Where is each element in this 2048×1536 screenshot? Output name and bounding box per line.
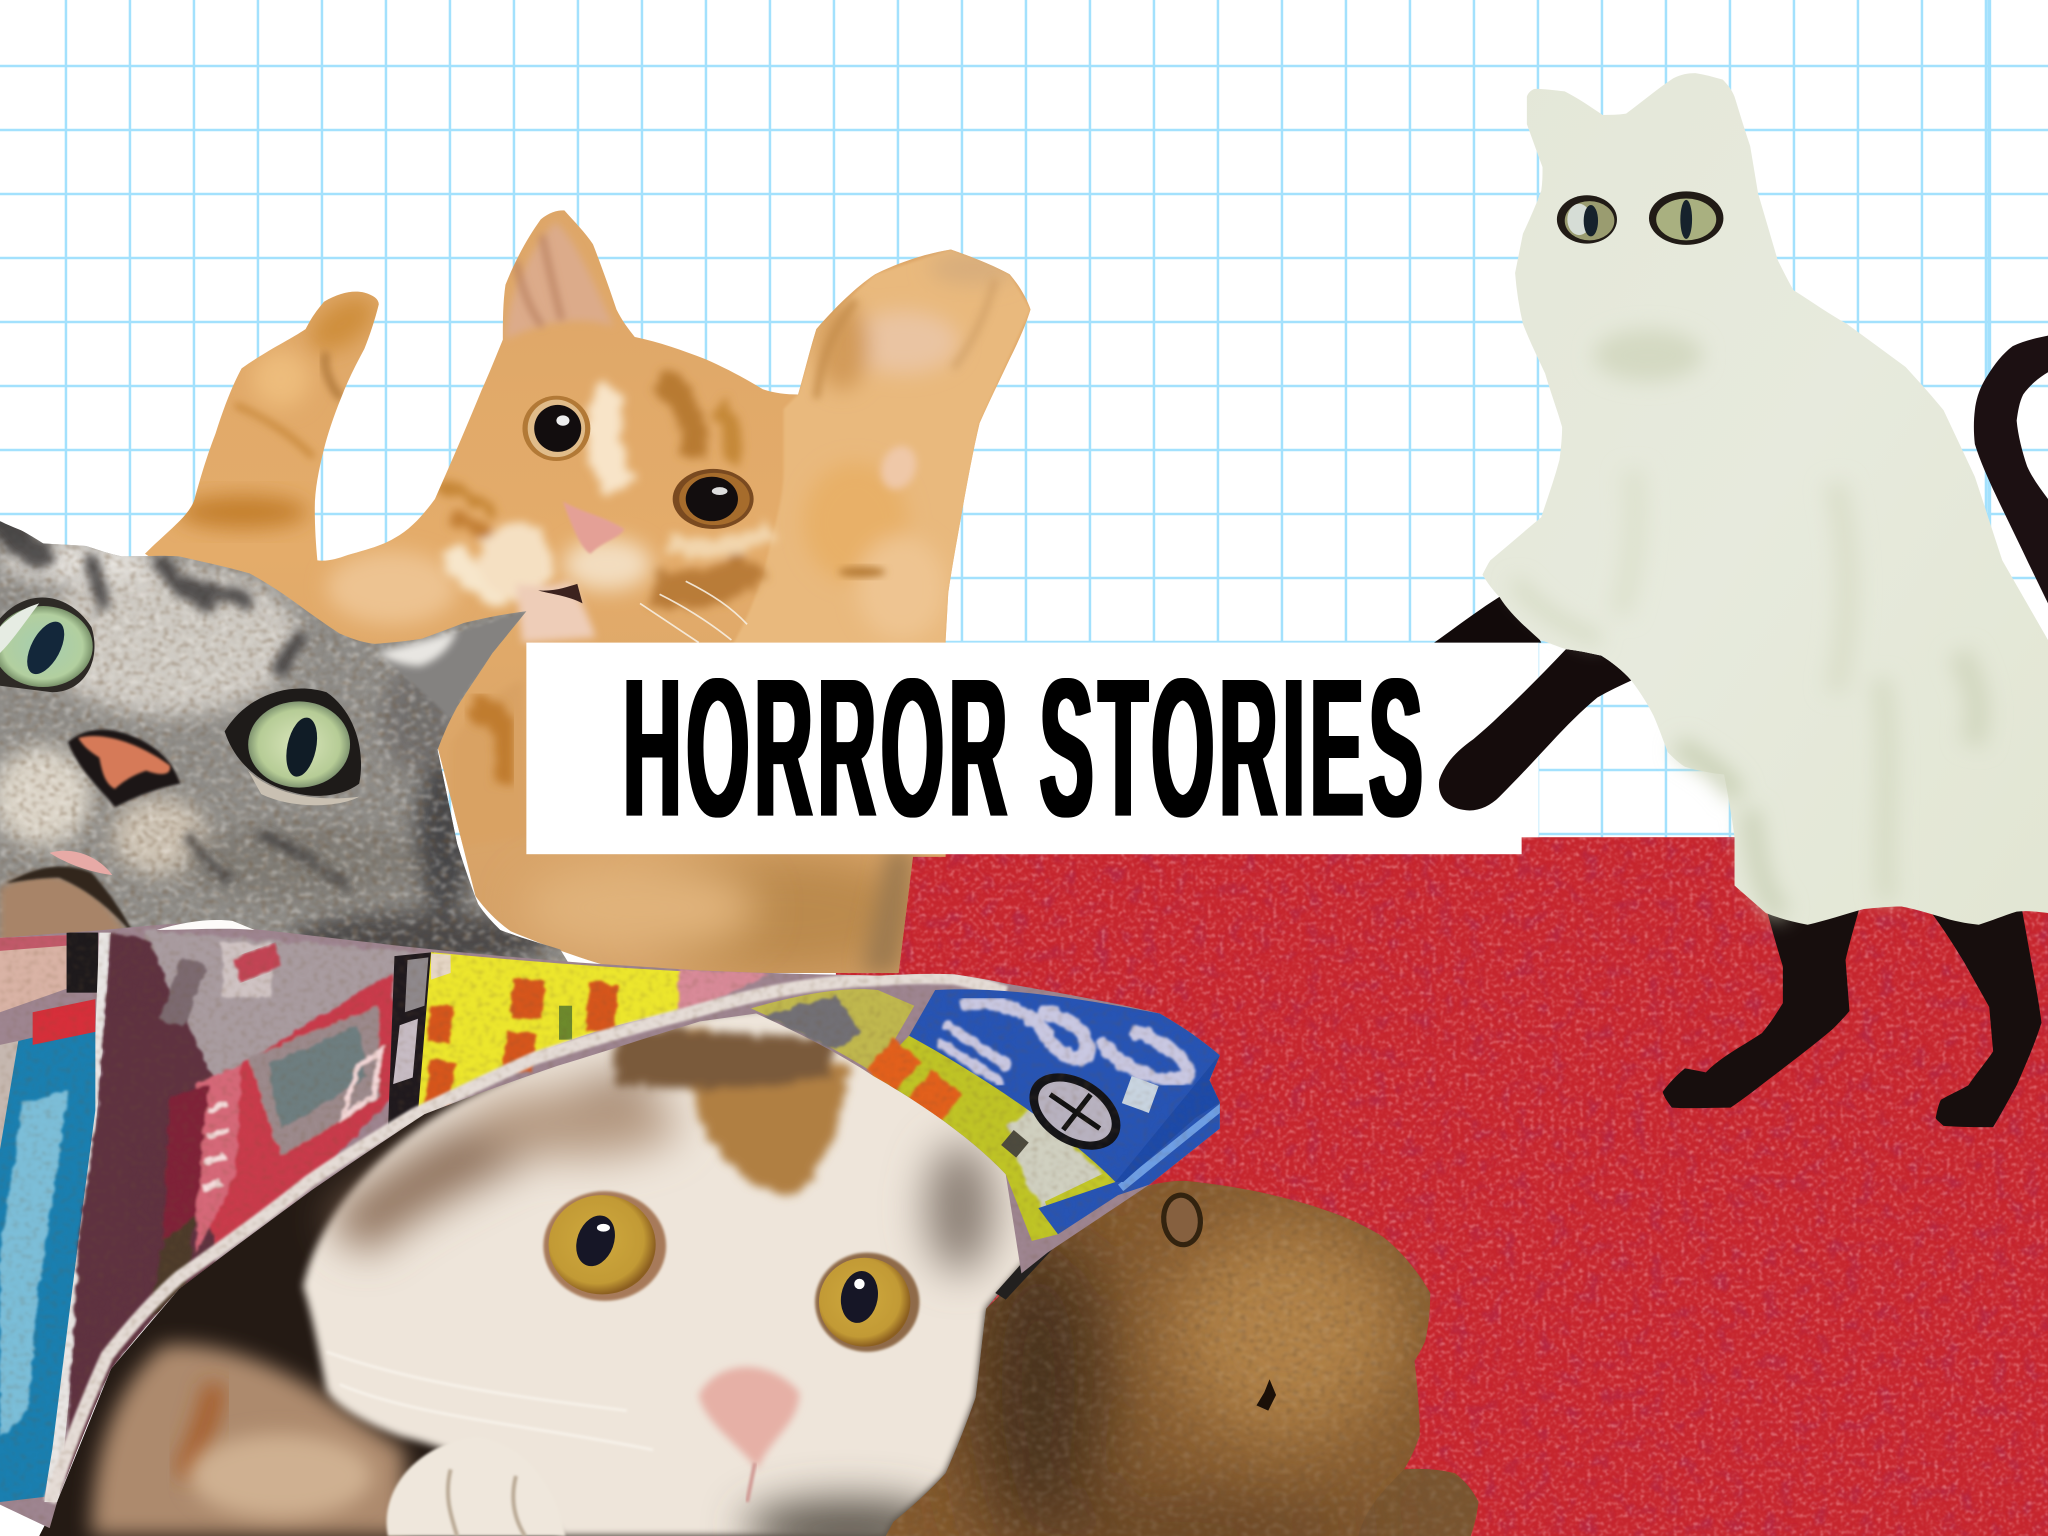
black front arm	[1439, 649, 1631, 810]
white fur texture	[0, 516, 581, 973]
blue section square	[1122, 1076, 1159, 1113]
ghost sheet	[1482, 73, 2048, 925]
photo cutout: black cat wearing ghost sheet	[1434, 73, 2048, 1127]
forehead and pale fur	[0, 541, 549, 969]
title banner	[526, 637, 1539, 858]
ginger cat mouth	[516, 581, 596, 643]
blue left strip	[0, 999, 95, 1502]
black tail	[1974, 336, 2048, 603]
bear eye	[1256, 1379, 1276, 1411]
photo cutout: newspaper held over the kitten	[0, 914, 1228, 1536]
sheet folds	[1515, 329, 1978, 914]
kitten mouth line	[747, 1463, 755, 1502]
body fur	[327, 551, 457, 624]
ginger cat nose	[563, 502, 624, 554]
grey cat left eye	[0, 598, 95, 692]
newspaper print grain	[0, 914, 1228, 1536]
background: red carpet	[836, 837, 2048, 1536]
blue section circle logo	[1016, 1058, 1134, 1166]
red page	[150, 973, 398, 1319]
grey cat nose	[68, 730, 180, 807]
grey page top	[144, 930, 431, 1084]
grey cat mouth and tongue	[0, 851, 137, 953]
ghost left eye hole	[1557, 195, 1617, 244]
kitten whisker fur	[327, 1352, 653, 1450]
kitten paw	[387, 1437, 566, 1536]
white paper edge	[50, 977, 1006, 1502]
photo cutout: grey tabby cat	[0, 516, 581, 980]
kitten head	[303, 1006, 1032, 1536]
head stripes and highlights	[438, 379, 771, 601]
black hind leg left	[1663, 906, 1860, 1108]
bear light and shade	[967, 1221, 1404, 1536]
dark header block	[67, 933, 98, 993]
dark column	[388, 952, 434, 1131]
background: blue grid paper	[0, 0, 2048, 862]
inner ear	[505, 222, 614, 340]
photo strip	[751, 989, 914, 1074]
black front arm upper	[1434, 597, 1541, 643]
bear fur grain	[836, 1176, 1489, 1536]
raised paw	[731, 249, 1031, 647]
kitten right eye	[815, 1253, 920, 1352]
orange forehead patch	[614, 1025, 849, 1195]
kitten body	[91, 1344, 405, 1536]
pink top strip	[679, 969, 771, 1012]
white gutter	[44, 933, 111, 1502]
ghost right eye hole	[1649, 191, 1723, 245]
ear	[376, 611, 526, 718]
photo cutout: kitten hiding under newspaper	[26, 993, 1045, 1536]
side and chest	[451, 679, 927, 973]
dark fur texture	[0, 516, 581, 973]
kitten left eye	[543, 1191, 666, 1301]
photo cutout: teddy bear	[836, 1176, 1489, 1536]
maroon page	[65, 934, 216, 1489]
tabby markings	[0, 522, 346, 888]
yellow price band	[418, 952, 692, 1113]
photo cutout: ginger cat with raised paws	[131, 196, 1045, 980]
black hind leg right	[1930, 909, 2041, 1127]
muzzle highlight	[563, 538, 652, 590]
left arm	[178, 286, 384, 529]
dark fold behind newspaper	[995, 1234, 1058, 1300]
whiskers	[640, 581, 747, 643]
ginger cat left eye	[522, 396, 590, 461]
big white numeral shapes	[943, 1002, 1188, 1081]
bear ear spot	[1158, 1190, 1206, 1249]
kitten nose	[699, 1367, 799, 1469]
pink page corner	[0, 935, 67, 1012]
blue advert section	[909, 989, 1220, 1234]
ginger cat right eye	[673, 469, 754, 529]
yellow and orange section	[866, 990, 1118, 1241]
grey cat right eye	[225, 688, 361, 805]
bear ear and arm	[1327, 1211, 1430, 1365]
white torn edge on newspaper top	[157, 920, 255, 930]
